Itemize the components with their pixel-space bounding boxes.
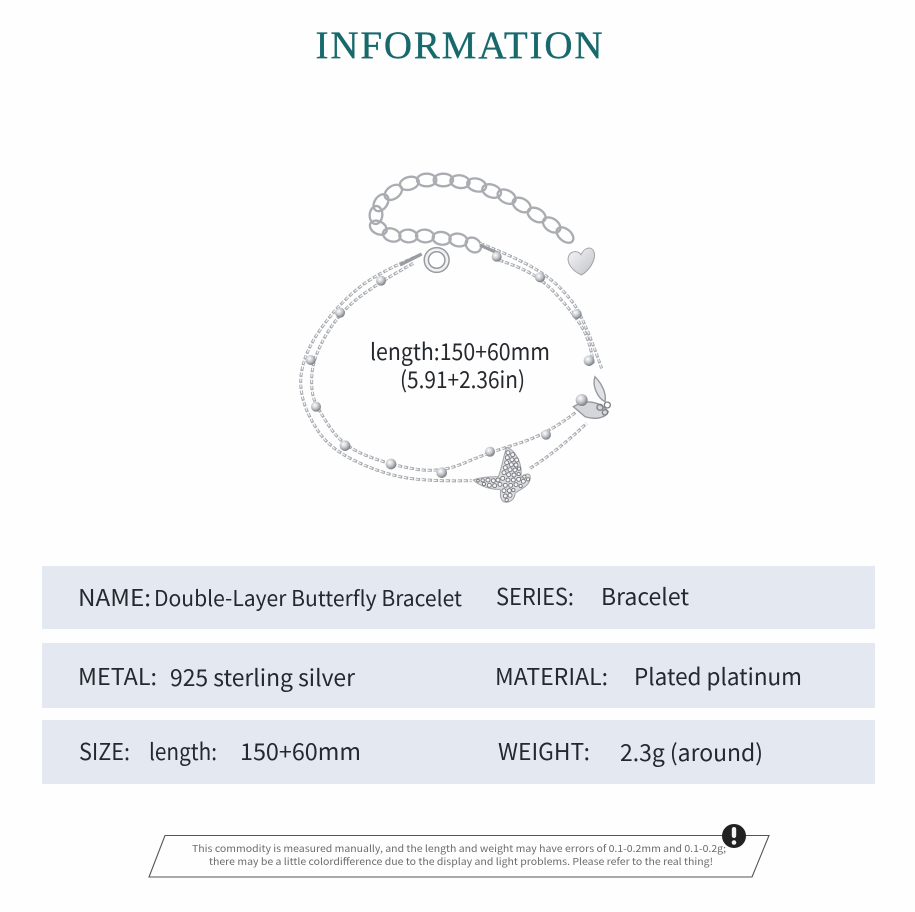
bracelet length label	[370, 333, 550, 395]
chain strands	[301, 243, 602, 481]
panel: name and series row: NAME:	[78, 579, 151, 613]
panel: name and series row	[42, 566, 875, 629]
beads	[306, 252, 594, 478]
heart charm	[568, 248, 594, 275]
large pave butterfly	[473, 447, 530, 502]
bracelet illustration	[301, 174, 610, 502]
panel: name and series row: Bracelet	[601, 578, 689, 612]
small side butterfly	[573, 377, 610, 418]
bracelet length label: length:150+60mm	[370, 333, 550, 367]
panel: size and weight row: WEIGHT:	[498, 733, 590, 767]
icon: warning exclamation	[722, 824, 746, 848]
disclaimer box: This commodity is measured manually, and the length and weight may have errors of 0.1-0.2mm and 0.1-0.2g;	[192, 841, 726, 855]
spring ring clasp	[426, 250, 447, 270]
title: INFORMATION	[316, 24, 602, 67]
panel: size and weight row	[42, 720, 875, 784]
panel: metal and material row	[42, 643, 875, 708]
extender chain	[367, 174, 576, 255]
panel: size and weight row: SIZE:	[79, 733, 130, 767]
disclaimer box	[149, 836, 769, 877]
panel: name and series row: Double-Layer Butterfly Bracelet	[154, 582, 462, 613]
panel: name and series row: SERIES:	[496, 578, 574, 612]
panel: metal and material row: MATERIAL:	[495, 658, 608, 692]
panel: size and weight row: 2.3g (around)	[620, 734, 763, 768]
panel: metal and material row: 925 sterling silver	[170, 659, 355, 693]
panel: size and weight row: 150+60mm	[240, 733, 361, 767]
disclaimer box: there may be a little colordifference due to the display and light problems. Please refer to the real thing!	[209, 854, 713, 868]
bracelet length label: (5.91+2.36in)	[400, 361, 525, 395]
panel: metal and material row: METAL:	[78, 658, 157, 692]
panel: size and weight row: length:	[149, 733, 217, 767]
panel: metal and material row: Plated platinum	[634, 658, 802, 692]
